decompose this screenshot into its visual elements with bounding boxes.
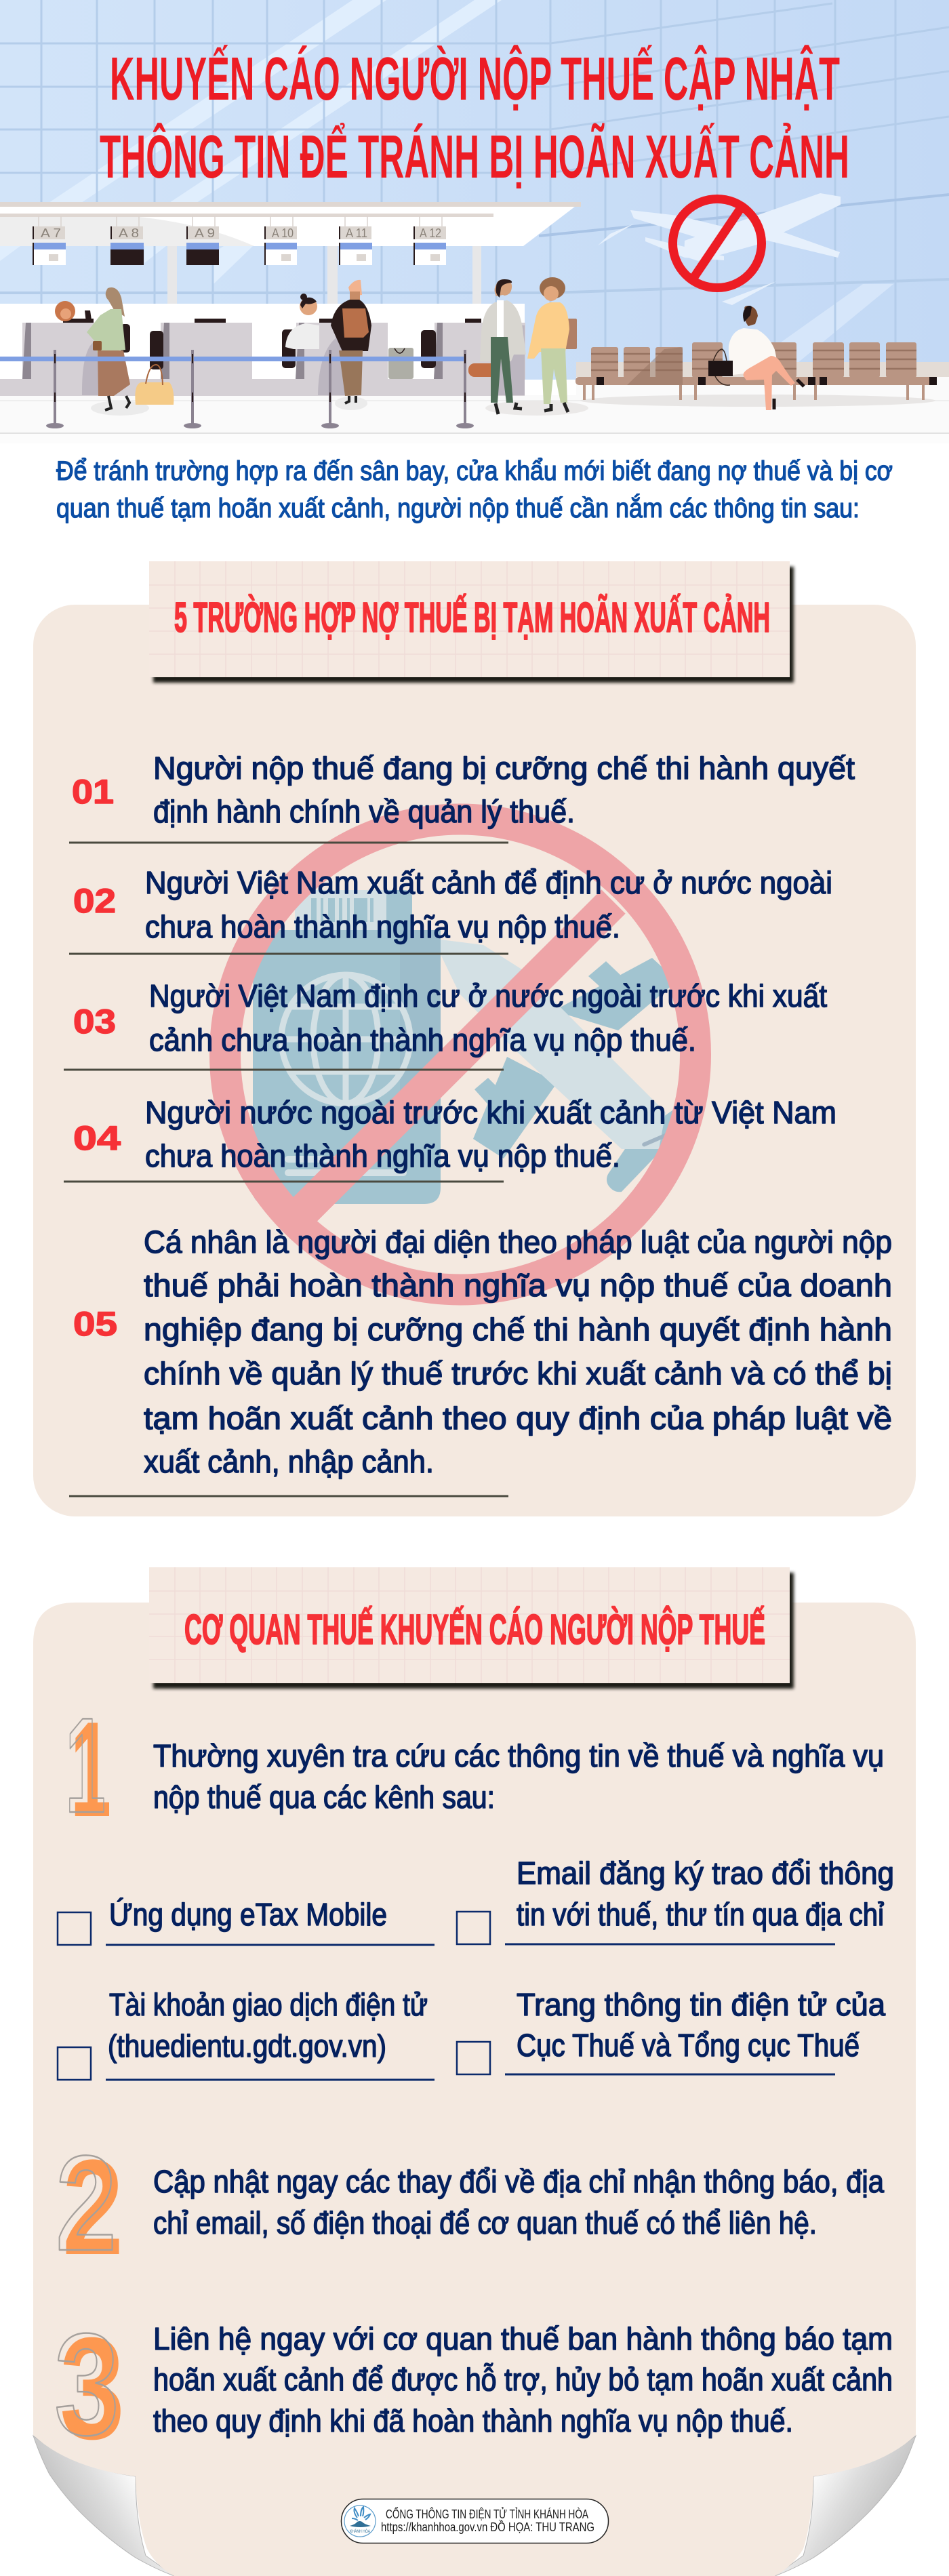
step 3: Liên hệ ngay với cơ quan thuế ban hành thông báo tạm [153, 2321, 893, 2356]
check-in desk signs [33, 216, 446, 265]
panel background [33, 1603, 916, 2576]
case 05: Cá nhân là người đại diện theo pháp luật của người nộp [144, 1224, 892, 1260]
panel background [33, 605, 916, 1516]
case 04 [64, 1095, 836, 1182]
channel: eTax Mobile: Ứng dụng eTax Mobile [109, 1897, 387, 1932]
no-entry sign on the glass [672, 199, 762, 287]
step 2: 2 [62, 2132, 123, 2283]
hero illustration: airport check-in hall [0, 0, 949, 443]
case 02 [69, 865, 832, 954]
step 1: 1 [70, 1694, 111, 1845]
case 05: tạm hoãn xuất cảnh theo quy định của pháp luật về [144, 1401, 892, 1436]
step 2: 2 [56, 2128, 117, 2279]
case 02: 02 [73, 882, 116, 920]
watermark: passport and plane with prohibition sign [225, 819, 706, 1289]
channel: electronic account: Tài khoản giao dịch điện tử [109, 1987, 428, 2022]
channel: tax department website: Trang thông tin điện tử của [517, 1987, 885, 2022]
curled corner left [33, 2436, 174, 2576]
footer credit badge [342, 2499, 609, 2543]
icon: Khanh Hoa logo [344, 2505, 376, 2537]
step 1: Thường xuyên tra cứu các thông tin về thuế và nghĩa vụ [153, 1738, 884, 1773]
step 3: theo quy định khi đã hoàn thành nghĩa vụ nộp thuế. [153, 2403, 793, 2438]
channel: electronic account: (thuedientu.gdt.gov.vn) [108, 2028, 386, 2064]
step 1 [65, 1690, 884, 1845]
case 03 [64, 978, 827, 1071]
case 05: 05 [73, 1305, 117, 1343]
header: recommendation [149, 1567, 794, 1689]
check-in desks [0, 319, 525, 396]
footer credit badge: https://khanhhoa.gov.vn ĐỒ HỌA: THU TRANG [381, 2520, 594, 2534]
passenger: woman in green sweater [85, 287, 149, 416]
case 02: chưa hoàn thành nghĩa vụ nộp thuế. [145, 909, 620, 944]
channel: email and mail: tin với thuế, thư tín qua địa chỉ [517, 1897, 884, 1932]
case 02: Người Việt Nam xuất cảnh để định cư ở nước ngoài [145, 865, 832, 900]
channel: email and mail: Email đăng ký trao đổi thông [517, 1855, 894, 1891]
case 01: định hành chính về quản lý thuế. [153, 794, 575, 829]
channel: tax department website [457, 1987, 885, 2076]
black handbag [708, 349, 733, 385]
case 04: Người nước ngoài trước khi xuất cảnh từ Việt Nam [145, 1095, 836, 1130]
channel: email and mail [457, 1855, 894, 1946]
plane seen through the glass [598, 193, 841, 305]
yellow hand bag [135, 365, 174, 405]
check-in desk signs: A 9 [195, 226, 215, 240]
case 05: chính về quản lý thuế trước khi xuất cảnh và có thể bị [144, 1356, 892, 1391]
check-in desk signs: A 8 [119, 226, 139, 240]
panel: recommendations [33, 1567, 916, 2576]
bench shadow [580, 395, 935, 407]
desk agents [55, 294, 319, 349]
icon: Khanh Hoa logo: KHÁNH HÒA [350, 2529, 370, 2534]
case 01: 01 [72, 773, 114, 811]
intro text: quan thuế tạm hoãn xuất cảnh, người nộp thuế cần nắm các thông tin sau: [56, 493, 860, 523]
channel: eTax Mobile [58, 1897, 435, 1946]
bench seats [576, 342, 937, 400]
glass wall sky [0, 0, 949, 380]
case 03: 03 [73, 1003, 116, 1041]
channel: tax department website: Cục Thuế và Tổng cục Thuế [517, 2028, 860, 2063]
step 3: 3 [60, 2308, 125, 2470]
case 03: Người Việt Nam định cư ở nước ngoài trước khi xuất [149, 978, 827, 1013]
passenger: man with backpack [331, 280, 371, 410]
step 2 [56, 2128, 884, 2283]
case 01 [69, 750, 855, 843]
check-in desk signs: A 10 [272, 226, 294, 240]
channel: electronic account [58, 1987, 435, 2081]
pillars [167, 246, 481, 307]
footer credit badge: CỔNG THÔNG TIN ĐIỆN TỬ TỈNH KHÁNH HÒA [386, 2507, 588, 2521]
curled corner right [775, 2436, 916, 2576]
step 3 [54, 2303, 893, 2470]
case 01: Người nộp thuế đang bị cưỡng chế thi hành quyết [153, 750, 855, 786]
step 1: 1 [65, 1690, 106, 1841]
canopy [0, 202, 581, 246]
intro text [56, 456, 893, 523]
case 05: thuế phải hoàn thành nghĩa vụ nộp thuế của doanh [144, 1268, 892, 1303]
case 04: chưa hoàn thành nghĩa vụ nộp thuế. [145, 1138, 620, 1173]
check-in desk signs: A 7 [41, 226, 61, 240]
step 1: nộp thuế qua các kênh sau: [153, 1779, 495, 1815]
check-in desk signs: A 12 [420, 226, 441, 240]
check-in desk signs: A 11 [346, 226, 367, 240]
step 2: Cập nhật ngay các thay đổi về địa chỉ nhận thông báo, địa [153, 2164, 884, 2199]
case 05: nghiệp đang bị cưỡng chế thi hành quyết định hành [144, 1312, 892, 1347]
case 03: cảnh chưa hoàn thành nghĩa vụ nộp thuế. [149, 1022, 696, 1058]
title [100, 44, 849, 191]
stanchions and blue belt [0, 350, 474, 428]
case 05 [69, 1224, 892, 1497]
step 3: 3 [54, 2303, 119, 2466]
floor [0, 395, 949, 434]
case 05: xuất cảnh, nhập cảnh. [144, 1444, 434, 1479]
seated man [729, 306, 804, 410]
step 2: chỉ email, số điện thoại để cơ quan thuế có thể liên hệ. [153, 2205, 817, 2240]
case 04: 04 [73, 1119, 121, 1157]
header: 5 cases [149, 561, 794, 683]
two standing women [468, 277, 588, 416]
panel: 5 cases [33, 561, 916, 1516]
